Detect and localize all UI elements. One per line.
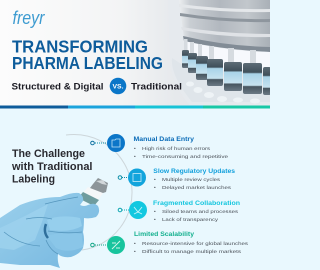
title: PHARMA LABELING (12, 53, 163, 73)
icon: manual data entry (91, 134, 125, 152)
item: fragmented collaboration (118, 201, 240, 223)
arc connector (66, 134, 132, 250)
text: scalability: Resource-intensive for global launches (142, 241, 249, 247)
item: slow regulatory updates (118, 168, 236, 191)
heading: the challenge: with Traditional (11, 161, 93, 173)
text: slow updates: Slow Regulatory Updates (153, 169, 236, 175)
icon: scalability (91, 236, 125, 254)
text: fragmented: • (154, 210, 156, 215)
divider bar (0, 106, 270, 108)
text: slow updates: • (154, 178, 156, 183)
text: manual data entry: Time-consuming and repetitive (142, 154, 228, 160)
item: manual data entry (91, 134, 228, 160)
subtitle left: Structured & Digital (12, 82, 103, 92)
text: scalability: • (134, 242, 136, 247)
text: fragmented (153, 201, 240, 223)
badge: vs (110, 78, 126, 94)
text: slow updates (153, 169, 236, 191)
text: manual data entry: High risk of human errors (142, 146, 211, 152)
icon: freyr logo: freyr (12, 8, 45, 28)
vial (78, 178, 108, 206)
text: manual data entry (134, 137, 228, 160)
badge: vs: VS. (113, 84, 124, 90)
text: fragmented: • (154, 218, 156, 223)
text: scalability: Limited Scalability (134, 232, 195, 238)
item: limited scalability (91, 232, 249, 255)
text: slow updates: Delayed market launches (162, 185, 232, 191)
photo: vial filling machine (168, 0, 271, 106)
title: TRANSFORMING (12, 36, 148, 56)
text: manual data entry: • (134, 147, 136, 152)
text: scalability (134, 232, 249, 255)
heading: the challenge: Labeling (12, 174, 55, 186)
heading: the challenge: The Challenge (12, 148, 85, 160)
icon: slow updates (118, 168, 146, 186)
text: manual data entry: • (134, 155, 136, 160)
text: slow updates: • (154, 186, 156, 191)
text: fragmented: Siloed teams and processes (162, 209, 239, 215)
text: fragmented: Fragmented Collaboration (153, 201, 240, 207)
text: scalability: • (134, 250, 136, 255)
text: fragmented: Lack of transparency (162, 217, 219, 223)
subtitle right: Traditional (131, 82, 182, 92)
illustration: gloved hand holding vial (0, 178, 108, 268)
text: slow updates: Multiple review cycles (162, 177, 221, 183)
text: manual data entry: Manual Data Entry (134, 137, 195, 143)
heading: the challenge (11, 148, 93, 186)
title (12, 36, 163, 73)
glove (0, 193, 99, 268)
icon: fragmented (118, 201, 147, 219)
text: scalability: Difficult to manage multiple markets (142, 249, 242, 255)
panel: header (0, 0, 271, 106)
